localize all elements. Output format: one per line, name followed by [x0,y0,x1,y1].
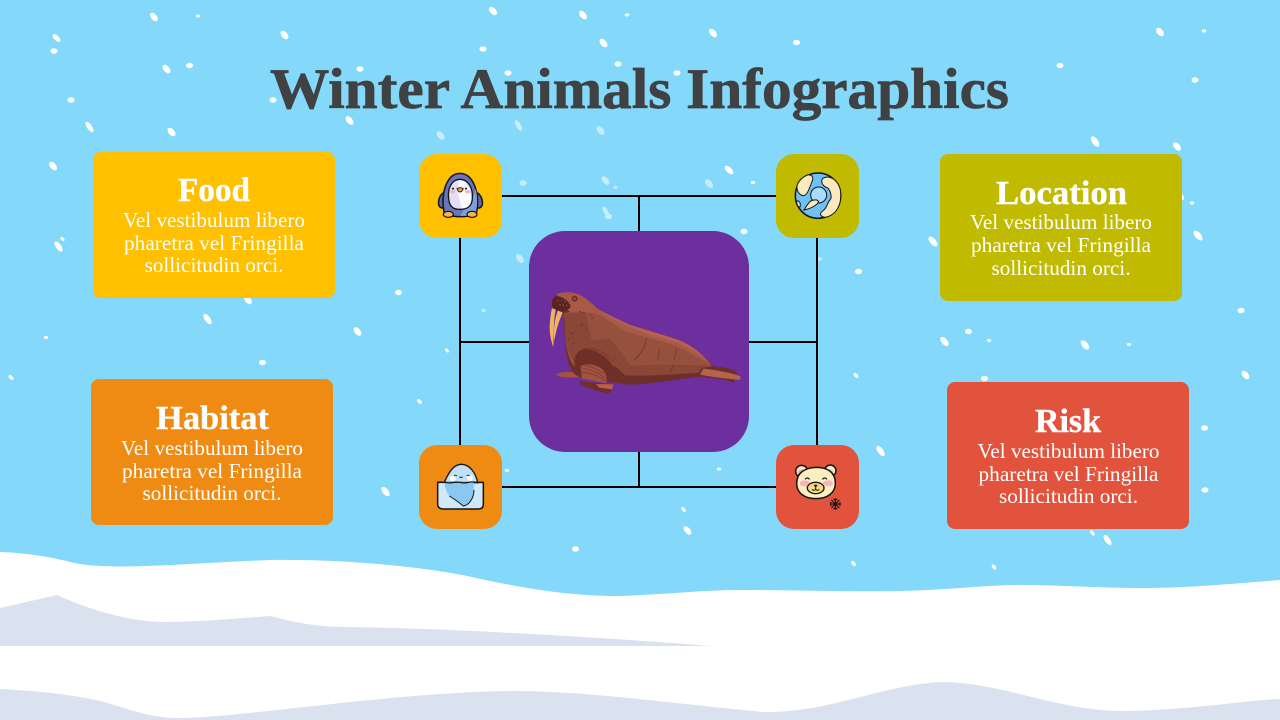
icon: walrus [550,292,741,393]
icon tile: globe [776,154,859,238]
risk body text [978,439,1160,508]
snow hill far left [0,595,712,646]
food heading: Food [178,172,250,209]
icon tile: iceberg [419,445,502,529]
location body text: Vel vestibulum libero [970,210,1152,234]
icon: bear face [796,465,841,510]
icon tile: polar bear [776,445,859,529]
icon: globe [795,173,841,218]
icon: iceberg in water [438,464,483,509]
location body text: pharetra vel Fringilla [971,233,1152,257]
snow hill foreground [0,682,1280,720]
habitat body text: sollicitudin orci. [142,481,282,505]
location heading: Location [996,175,1127,212]
panel: risk [947,382,1189,529]
risk body text: Vel vestibulum libero [978,439,1160,463]
panel: location [940,154,1182,301]
icon: penguin [439,173,482,217]
habitat body text: Vel vestibulum libero [121,436,303,460]
connector lines [460,196,817,487]
panel: food [93,152,335,298]
title: Winter Animals Infographics [270,58,1009,121]
habitat body text [121,436,303,505]
panel: habitat [91,379,333,525]
location body text [970,210,1152,280]
food body text: pharetra vel Fringilla [124,231,305,255]
risk body text: sollicitudin orci. [999,484,1138,508]
food body text: Vel vestibulum libero [123,208,305,232]
risk heading: Risk [1035,403,1101,440]
snow ground [0,552,1280,720]
risk body text: pharetra vel Fringilla [978,462,1159,486]
icon tile: penguin [419,154,502,238]
food body text [123,208,305,277]
food body text: sollicitudin orci. [144,253,284,277]
location body text: sollicitudin orci. [992,256,1130,280]
habitat body text: pharetra vel Fringilla [122,459,303,483]
central walrus tile [529,231,749,452]
habitat heading: Habitat [156,400,270,437]
